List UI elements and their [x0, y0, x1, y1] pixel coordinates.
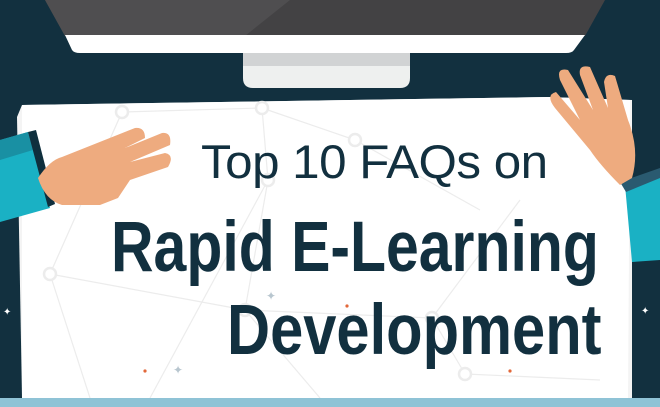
paper sheet	[17, 97, 632, 398]
paper sheet: ✦	[266, 289, 276, 303]
monitor stand	[243, 53, 410, 88]
background scene: ✦	[641, 306, 649, 317]
left hand	[0, 128, 171, 222]
title: Rapid E-Learning: Rapid E-Learning	[111, 208, 599, 287]
bottom strip	[0, 398, 660, 407]
title: Top 10 FAQs on: Top 10 FAQs on	[201, 135, 548, 188]
background scene: ✦	[3, 307, 11, 318]
right hand	[550, 66, 660, 262]
paper sheet: ✦	[173, 363, 183, 377]
title: Development: Development	[227, 291, 602, 370]
monitor	[45, 0, 605, 53]
